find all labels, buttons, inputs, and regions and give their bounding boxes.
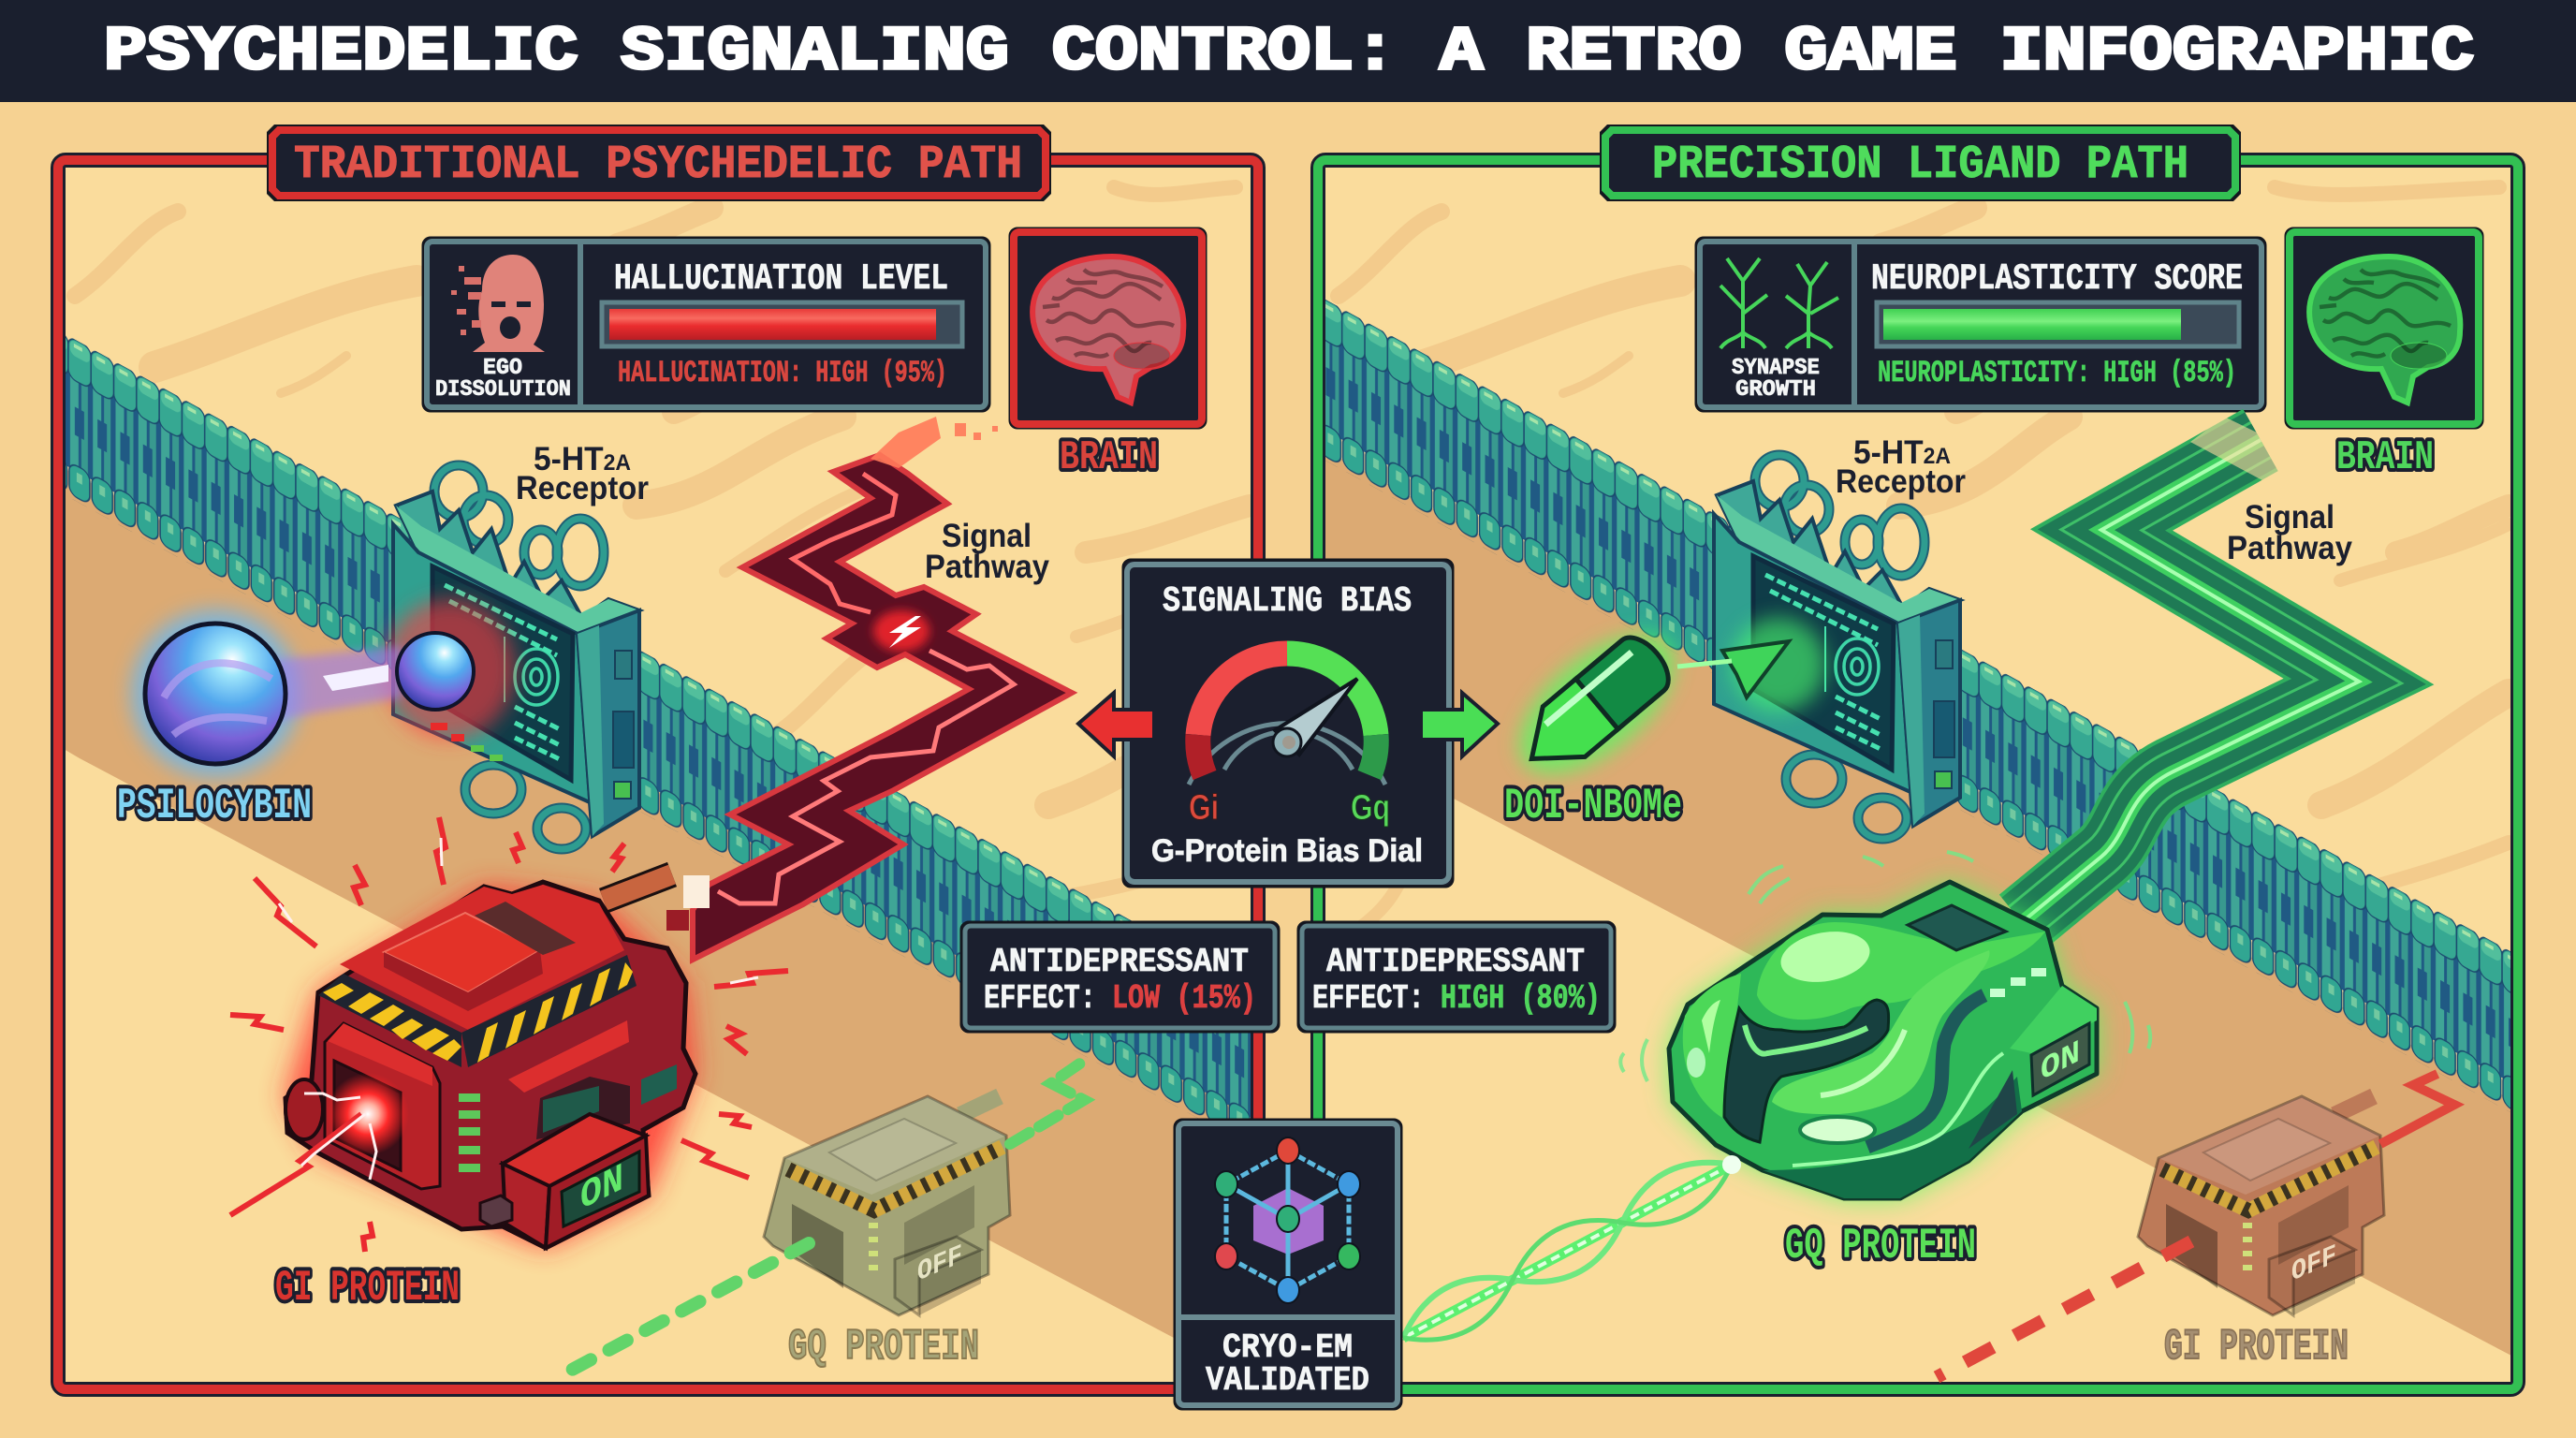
- gauge labels: Gi: [1189, 788, 1219, 828]
- psilocybin molecule: [131, 609, 474, 778]
- heading: precision ligand path: PRECISION LIGAND PATH: [1652, 139, 2188, 192]
- bar: neuroplasticity 85%: [1877, 302, 2239, 346]
- badge: cryo-em validated: VALIDATED: [1206, 1361, 1369, 1400]
- gq protein machine: inactive: [764, 1096, 1010, 1315]
- side panel and green screen: [508, 1020, 629, 1093]
- burst at machine port: [666, 875, 710, 931]
- flash: [327, 1073, 409, 1155]
- label: doi-nbome: DOI-NBOMe: [1504, 782, 1682, 830]
- on switch box: [503, 1114, 649, 1248]
- gi protein machine: inactive: OFF: [2291, 1240, 2336, 1290]
- fading pathway sparks: [871, 417, 998, 468]
- label: 5-HT2A receptor left: [516, 441, 649, 506]
- panel: precision ligand path: [1301, 160, 2537, 1389]
- label: psilocybin: PSILOCYBIN: [117, 782, 312, 830]
- dark visor: [1724, 1000, 1889, 1142]
- dashed pathway: inactive gq signal: [558, 1061, 1084, 1377]
- upper bright lobe: [1757, 922, 2045, 1020]
- motion ripples: [1620, 852, 2150, 1081]
- panel border: [58, 160, 1258, 1389]
- callout: antidepressant high: EFFECT: HIGH (80%): [1312, 979, 1601, 1018]
- panel: signaling bias dial: Gq: [1351, 788, 1390, 828]
- leds: [1990, 968, 2046, 997]
- signal pathway: green: [2022, 417, 2359, 922]
- hud: hallucination level: HALLUCINATION LEVEL: [614, 258, 948, 300]
- badge: cryo-em validated: CRYO-EM: [1222, 1328, 1353, 1367]
- output tube: [604, 874, 672, 901]
- vent grid: [1908, 905, 2006, 950]
- callout: antidepressant high: ANTIDEPRESSANT: [1326, 943, 1585, 981]
- label: gi protein inactive: GI PROTEIN: [2164, 1323, 2349, 1372]
- gq protein machine: active: [1620, 852, 2150, 1198]
- receptor: left 5-HT2A: [384, 465, 639, 849]
- panel: signaling bias dial: [1123, 560, 1453, 887]
- hud: neuroplasticity score: [1696, 238, 2265, 411]
- connector: [480, 1196, 512, 1226]
- door with window: [325, 1023, 440, 1189]
- bottom dark band: [1763, 1077, 2022, 1198]
- icon: molecular cube: [1215, 1137, 1360, 1303]
- gq protein machine: inactive: OFF: [917, 1240, 962, 1290]
- panel: signaling bias dial: SIGNALING BIAS: [1163, 581, 1412, 622]
- hud: hallucination level: [423, 238, 989, 411]
- hazard stripes: [318, 974, 461, 1067]
- icon: red brain: [1032, 257, 1183, 403]
- badge: cryo-em validated: [1175, 1120, 1401, 1409]
- hud: hallucination level: DISSOLUTION: [435, 377, 571, 403]
- panel: traditional psychedelic path: [37, 160, 1273, 1389]
- left lobe: [1683, 974, 1741, 1119]
- on block and panel: [2010, 986, 2097, 1053]
- signal pathway: red zigzag: [666, 417, 1072, 960]
- gauge arcs: [1189, 653, 1385, 785]
- dashed pathway: inactive gi signal: [1937, 1074, 2454, 1377]
- small bound orb: [397, 633, 474, 710]
- sparks: [230, 817, 788, 1252]
- green glow on receptor screen: [1732, 618, 1825, 712]
- label: 5-HT2A receptor right: [1836, 434, 1966, 500]
- callout: antidepressant high: [1298, 922, 1615, 1032]
- hud: neuroplasticity score: NEUROPLASTICITY SCORE: [1871, 258, 2243, 300]
- raised top block: [384, 913, 540, 992]
- shell silhouette: [1669, 882, 2097, 1198]
- label: signal pathway left: Signal: [942, 518, 1032, 554]
- heading: traditional psychedelic path: TRADITIONAL PSYCHEDELIC PATH: [294, 139, 1022, 192]
- label: 5-HT2A receptor left: Receptor: [516, 470, 649, 506]
- front lamp: [1800, 1117, 1875, 1143]
- lightning bolt node: [873, 610, 929, 652]
- panel: signaling bias dial: G-Protein Bias Dial: [1151, 833, 1423, 869]
- machine body: [285, 882, 695, 1248]
- led column: [459, 1093, 480, 1172]
- heading: precision ligand path: [1600, 125, 2241, 201]
- gi protein machine: inactive: [2138, 1096, 2384, 1315]
- callout: antidepressant low: ANTIDEPRESSANT: [990, 943, 1249, 981]
- label: gq protein inactive: GQ PROTEIN: [788, 1323, 979, 1372]
- label: signal pathway left: Pathway: [925, 549, 1050, 585]
- red glow on receptor screen: [384, 599, 515, 740]
- label: signal pathway left: [925, 518, 1050, 585]
- cell shadow band: [1325, 449, 2511, 1356]
- arrow: red left: [1078, 693, 1154, 756]
- brain card: green: [2286, 228, 2482, 481]
- gi protein machine: active: ON: [580, 1156, 623, 1222]
- icon: dissolving face: [451, 255, 545, 352]
- gq protein machine: active: ON: [2041, 1034, 2080, 1090]
- receptor: right 5-HT2A: [1714, 455, 1960, 839]
- gauge needle: [1273, 679, 1357, 756]
- helix signal beam: [1403, 1155, 1741, 1340]
- label: brain: BRAIN: [1060, 434, 1158, 481]
- callout: antidepressant low: [961, 922, 1279, 1032]
- dark stripe: [1867, 995, 1984, 1147]
- hud: neuroplasticity score: SYNAPSE: [1732, 356, 1820, 381]
- gi protein machine: active: [230, 817, 788, 1252]
- cell shadow band: [64, 468, 1251, 1380]
- hud: hallucination level: EGO: [483, 356, 522, 381]
- brain card: red: [1010, 228, 1206, 481]
- icon: green brain: [2309, 257, 2460, 403]
- cell membrane: [66, 335, 1251, 1118]
- panel border: [1318, 160, 2518, 1389]
- cell membrane: [1301, 286, 2537, 1127]
- label: signal pathway right: [2227, 499, 2353, 566]
- heading: traditional psychedelic path: [267, 125, 1051, 201]
- central s lobe: [1772, 950, 1989, 1114]
- dark side slit: [1969, 1070, 2017, 1149]
- label: signal pathway right: Signal: [2245, 499, 2334, 536]
- label: brain: BRAIN: [2336, 434, 2434, 481]
- title bar: PSYCHEDELIC SIGNALING CONTROL: A RETRO GAME INFOGRAPHIC: [104, 17, 2474, 87]
- callout: antidepressant low: EFFECT: LOW (15%): [984, 979, 1256, 1018]
- label: gq protein active: GQ PROTEIN: [1785, 1222, 1976, 1270]
- icon: synapse growth trees: [1720, 258, 1838, 348]
- label: 5-HT2A receptor right: 5-HT2A: [1853, 434, 1951, 471]
- hud: neuroplasticity score: GROWTH: [1735, 377, 1816, 403]
- title bar: [0, 0, 2576, 102]
- hud: neuroplasticity score: NEUROPLASTICITY: HIGH (85%): [1878, 356, 2236, 390]
- label: signal pathway right: Pathway: [2227, 530, 2353, 566]
- hud: hallucination level: HALLUCINATION: HIGH (95%): [618, 356, 947, 390]
- arrow: green right: [1421, 693, 1498, 756]
- doi-nbome pill: [1495, 608, 1789, 800]
- side nub: [285, 1079, 323, 1139]
- label: gi protein: GI PROTEIN: [275, 1264, 460, 1313]
- status lights: [431, 723, 503, 761]
- bar: hallucination 95%: [602, 302, 962, 346]
- label: 5-HT2A receptor right: Receptor: [1836, 463, 1966, 500]
- label: 5-HT2A receptor left: 5-HT2A: [534, 441, 631, 477]
